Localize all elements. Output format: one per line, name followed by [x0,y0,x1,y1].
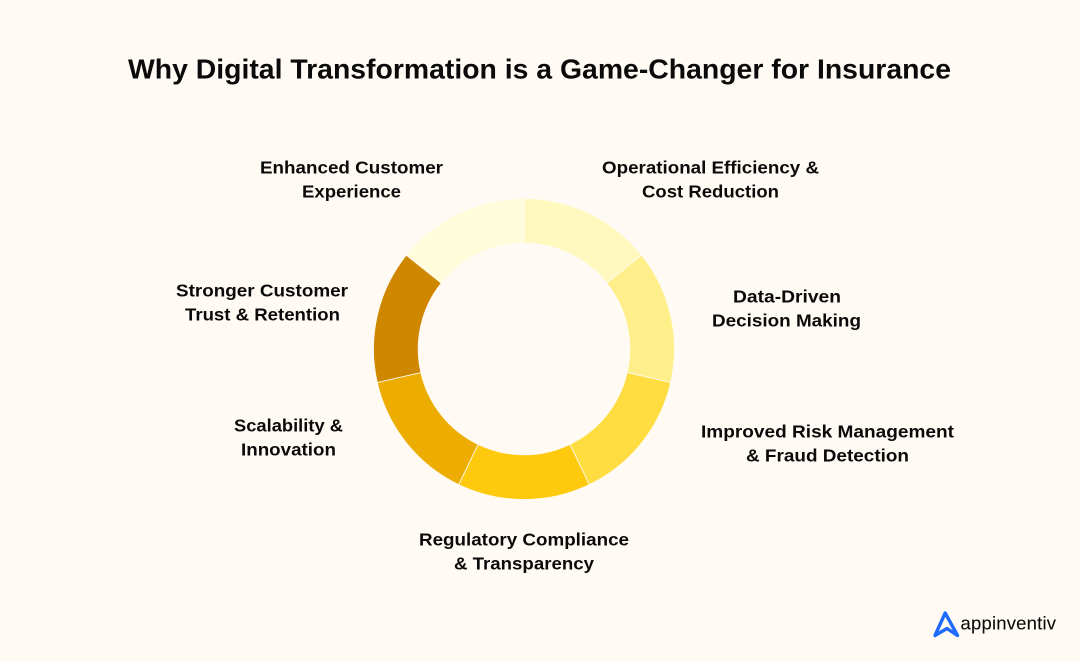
label: stronger customer trust [176,280,348,324]
logo wordmark: appinventiv [960,612,1057,634]
label: enhanced customer experience: Enhanced Customer [260,158,443,178]
label: operational efficiency and cost reduction: Operational Efficiency & [602,158,819,178]
label: data-driven decision making: Decision Making [712,310,861,330]
label: improved risk management: & Fraud Detection [746,446,909,466]
label: regulatory compliance: Regulatory Compliance [419,530,629,550]
label: operational efficiency and cost reduction [602,158,819,202]
label: enhanced customer experience [260,158,443,202]
label: regulatory compliance [419,530,629,574]
segment: operational efficiency [524,198,642,283]
segment: data-driven [607,255,674,382]
donut chart [374,198,674,500]
title: Why Digital Transformation is a Game-Changer for Insurance [128,54,951,84]
label: data-driven decision making: Data-Driven [733,286,841,306]
label: data-driven decision making [712,286,861,330]
segment: customer trust [374,255,441,382]
label: operational efficiency and cost reduction: Cost Reduction [642,182,779,202]
label: enhanced customer experience: Experience [302,182,401,202]
segment: regulatory compliance [459,444,589,500]
segment: customer experience [406,198,524,283]
label: stronger customer trust: Trust & Retention [185,304,340,324]
label: improved risk management: Improved Risk Management [701,422,954,442]
icon: logo arrow [935,613,958,636]
label: regulatory compliance: & Transparency [454,554,594,574]
segment: scalability [377,373,478,485]
label: scalability and innovation [234,416,343,460]
label: scalability and innovation: Innovation [241,440,336,460]
label: improved risk management [701,422,954,466]
label: scalability and innovation: Scalability & [234,416,343,436]
label: stronger customer trust: Stronger Customer [176,280,348,300]
segment: risk management [570,373,671,485]
logo: appinventiv [935,612,1057,636]
